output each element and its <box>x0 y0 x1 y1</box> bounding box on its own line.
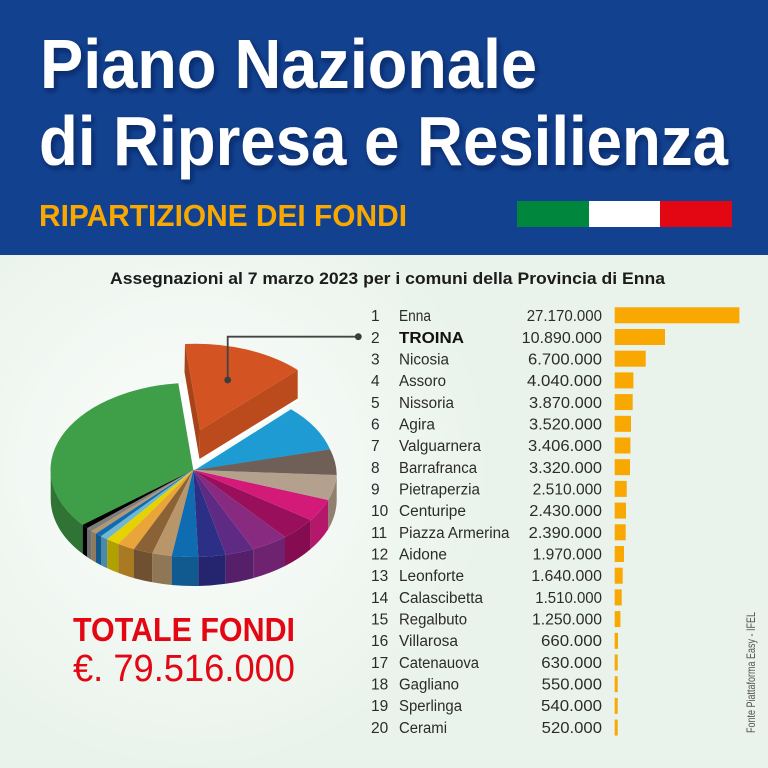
header band <box>0 0 768 255</box>
row 12 Aidone: 12 <box>371 546 388 564</box>
row 6 Agira: 6 <box>371 416 380 434</box>
row 11 Piazza Armerina <box>371 524 626 542</box>
row 5 Nissoria: 5 <box>371 395 380 412</box>
row 6 Agira: Agira <box>399 416 435 434</box>
row 16 Villarosa <box>371 633 618 650</box>
row 17 Catenauova: 630.000 <box>541 655 602 672</box>
row 16 Villarosa: 660.000 <box>541 633 602 650</box>
row 15 Regalbuto: Regalbuto <box>399 612 467 628</box>
row 5 Nissoria: Nissoria <box>399 395 454 412</box>
row 19 Sperlinga: 540.000 <box>541 698 602 715</box>
row 13 Leonforte: 13 <box>371 568 388 585</box>
row 10 Centuripe: 10 <box>371 503 389 520</box>
row 15 Regalbuto: 15 <box>371 612 388 628</box>
row 2 Troina: TROINA <box>399 330 464 347</box>
row 9 Pietraperzia: 2.510.000 <box>533 482 602 498</box>
row 8 Barrafranca: 3.320.000 <box>529 460 602 477</box>
source note: Fonte Piattaforma Easy - IFEL <box>744 612 758 733</box>
row 11 Piazza Armerina: Piazza Armerina <box>399 525 510 542</box>
row 20 Cerami: 20 <box>371 720 389 737</box>
row 7 Valguarnera: Valguarnera <box>399 438 481 455</box>
row 6 Agira <box>371 416 631 434</box>
row 18 Gagliano: 550.000 <box>542 676 602 694</box>
row 18 Gagliano: 18 <box>371 676 388 694</box>
row 13 Leonforte <box>371 568 623 585</box>
row 2 Troina: 10.890.000 <box>522 330 602 347</box>
row 3 Nicosia: 6.700.000 <box>528 352 602 368</box>
title <box>39 25 729 180</box>
icon: italian flag <box>517 201 732 227</box>
title: Piano Nazionale <box>40 25 537 103</box>
row 4 Assoro <box>371 372 633 390</box>
row 2 Troina <box>371 329 665 347</box>
row 12 Aidone <box>371 546 624 564</box>
callout line to Troina <box>224 333 362 383</box>
row 4 Assoro: Assoro <box>399 373 446 390</box>
pie chart <box>51 344 337 586</box>
row 9 Pietraperzia: Pietraperzia <box>399 482 480 498</box>
row 3 Nicosia <box>371 351 646 368</box>
row 14 Calascibetta: 1.510.000 <box>535 590 602 607</box>
row 20 Cerami: Cerami <box>399 720 447 737</box>
row 9 Pietraperzia <box>371 481 627 498</box>
row 15 Regalbuto <box>371 611 620 628</box>
exploded slice: Troina <box>184 344 298 459</box>
row 19 Sperlinga: 19 <box>371 698 388 715</box>
total funds: €. 79.516.000 <box>73 648 295 690</box>
background glow behind pie <box>0 256 490 768</box>
row 1 Enna: 1 <box>371 308 380 325</box>
row 3 Nicosia: Nicosia <box>399 352 449 368</box>
row 16 Villarosa: 16 <box>371 633 388 650</box>
row 17 Catenauova: Catenauova <box>399 655 479 672</box>
row 14 Calascibetta <box>371 589 622 607</box>
row 20 Cerami <box>371 720 618 737</box>
row 8 Barrafranca: 8 <box>371 460 380 477</box>
row 4 Assoro: 4 <box>371 373 380 390</box>
row 5 Nissoria <box>371 394 633 412</box>
row 7 Valguarnera <box>371 438 630 455</box>
row 19 Sperlinga: Sperlinga <box>399 698 462 715</box>
panel: header <box>0 0 768 255</box>
row 11 Piazza Armerina: 2.390.000 <box>529 525 602 542</box>
row 16 Villarosa: Villarosa <box>399 633 458 650</box>
subtitle: RIPARTIZIONE DEI FONDI <box>39 198 407 233</box>
row 19 Sperlinga <box>371 698 618 715</box>
row 8 Barrafranca: Barrafranca <box>399 460 477 477</box>
row 6 Agira: 3.520.000 <box>529 416 602 434</box>
row 12 Aidone: 1.970.000 <box>533 546 602 564</box>
row 7 Valguarnera: 7 <box>371 438 380 455</box>
row 14 Calascibetta: Calascibetta <box>399 590 483 607</box>
row 13 Leonforte: Leonforte <box>399 568 464 585</box>
pie top face slices <box>51 383 337 557</box>
row 10 Centuripe: 2.430.000 <box>529 503 602 520</box>
total funds <box>73 612 295 690</box>
row 18 Gagliano <box>371 676 618 694</box>
row 11 Piazza Armerina: 11 <box>371 525 387 542</box>
row 7 Valguarnera: 3.406.000 <box>528 438 602 455</box>
row 12 Aidone: Aidone <box>399 546 447 564</box>
row 8 Barrafranca <box>371 459 630 477</box>
row 1 Enna: Enna <box>399 308 431 325</box>
row 5 Nissoria: 3.870.000 <box>529 395 602 412</box>
chart heading: Assegnazioni al 7 marzo 2023 per i comuni della Provincia di Enna <box>110 269 666 288</box>
row 18 Gagliano: Gagliano <box>399 676 459 694</box>
pie side wall <box>51 470 337 586</box>
row 17 Catenauova: 17 <box>371 655 388 672</box>
row 10 Centuripe: Centuripe <box>399 503 466 520</box>
row 14 Calascibetta: 14 <box>371 590 389 607</box>
row 4 Assoro: 4.040.000 <box>527 373 602 390</box>
row 2 Troina: 2 <box>371 330 380 347</box>
row 15 Regalbuto: 1.250.000 <box>532 612 602 628</box>
row 13 Leonforte: 1.640.000 <box>531 568 602 585</box>
ranking table <box>371 307 739 737</box>
row 3 Nicosia: 3 <box>371 352 380 368</box>
row 20 Cerami: 520.000 <box>542 720 602 737</box>
row 10 Centuripe <box>371 503 626 520</box>
row 1 Enna: 27.170.000 <box>527 308 602 325</box>
row 17 Catenauova <box>371 654 618 672</box>
row 1 Enna <box>371 307 739 325</box>
page background <box>0 255 768 768</box>
row 9 Pietraperzia: 9 <box>371 482 380 498</box>
total funds: TOTALE FONDI <box>73 612 295 649</box>
